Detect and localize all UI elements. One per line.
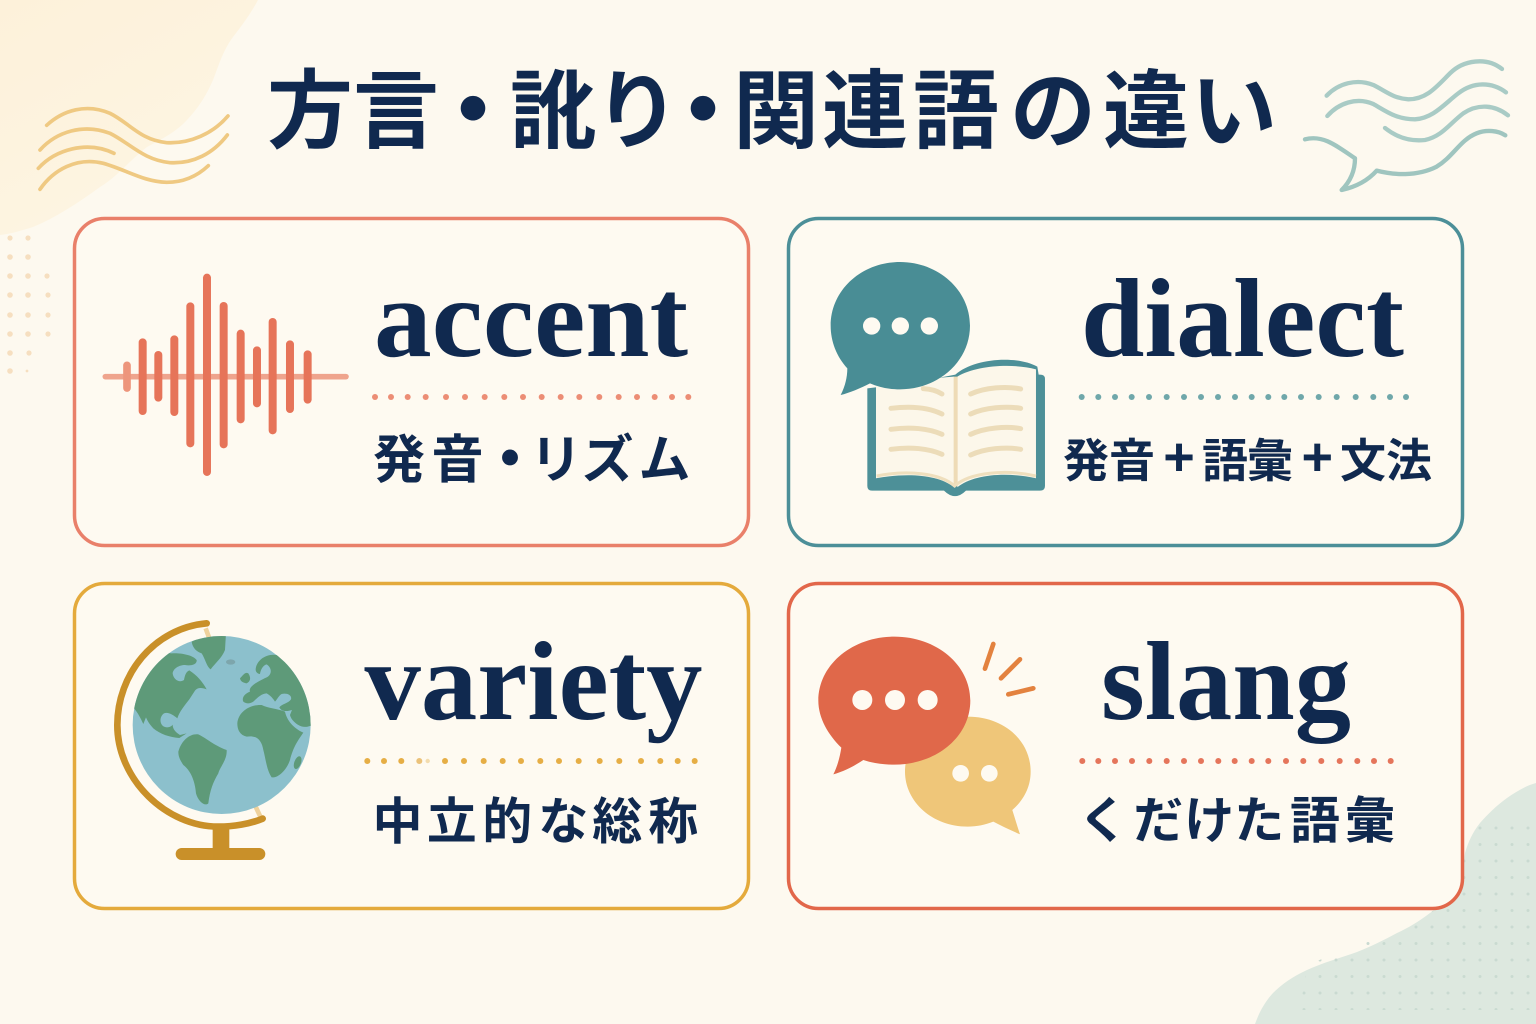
title: 訛り (510, 64, 680, 160)
description: accent: リズム (530, 432, 691, 490)
dotted divider (372, 394, 691, 400)
panel: accent (74, 218, 748, 546)
icon: globe (117, 623, 323, 860)
panel: dialect (788, 218, 1462, 546)
dotted divider (1079, 758, 1394, 764)
title: 方言 (267, 64, 439, 160)
panel: variety (74, 584, 748, 908)
icon: teal speech wave (1305, 61, 1508, 190)
panel: slang (788, 584, 1462, 908)
description: variety: 中立的な総称 (372, 794, 698, 850)
decorative dots: bottom right (1300, 815, 1536, 1010)
dotted divider (364, 758, 698, 764)
panel border: dialect (788, 218, 1462, 546)
decorative blob: top left (0, 0, 258, 235)
title: ・ (425, 58, 521, 166)
description: dialect: 語彙 (1202, 435, 1293, 487)
panel border: slang (788, 584, 1462, 908)
description: accent: ・ (479, 426, 541, 495)
description: dialect: 発音 (1063, 435, 1155, 487)
icon: yellow sound waves (38, 109, 228, 189)
title: ・ (655, 58, 751, 166)
panel border: variety (74, 584, 748, 908)
description: accent: 発音 (373, 432, 484, 490)
description: dialect: + (1163, 427, 1195, 487)
decorative blob: bottom right (1255, 783, 1536, 1024)
icon: sound waveform (105, 278, 346, 472)
word: variety: variety (364, 620, 702, 744)
dotted divider (1079, 394, 1409, 400)
icon: two speech bubbles (818, 637, 1033, 834)
icon: speech bubble and open book (831, 262, 1045, 496)
description: slang: くだけた語彙 (1078, 793, 1395, 849)
word: accent: accent (374, 257, 688, 381)
panel border: accent (74, 218, 748, 546)
word: slang: slang (1101, 620, 1351, 744)
word: dialect: dialect (1081, 257, 1404, 381)
description: dialect: 文法 (1340, 435, 1432, 487)
decorative dots: left (7, 235, 51, 374)
description: dialect: + (1302, 427, 1333, 487)
title: 関連語の違い (733, 64, 1277, 160)
